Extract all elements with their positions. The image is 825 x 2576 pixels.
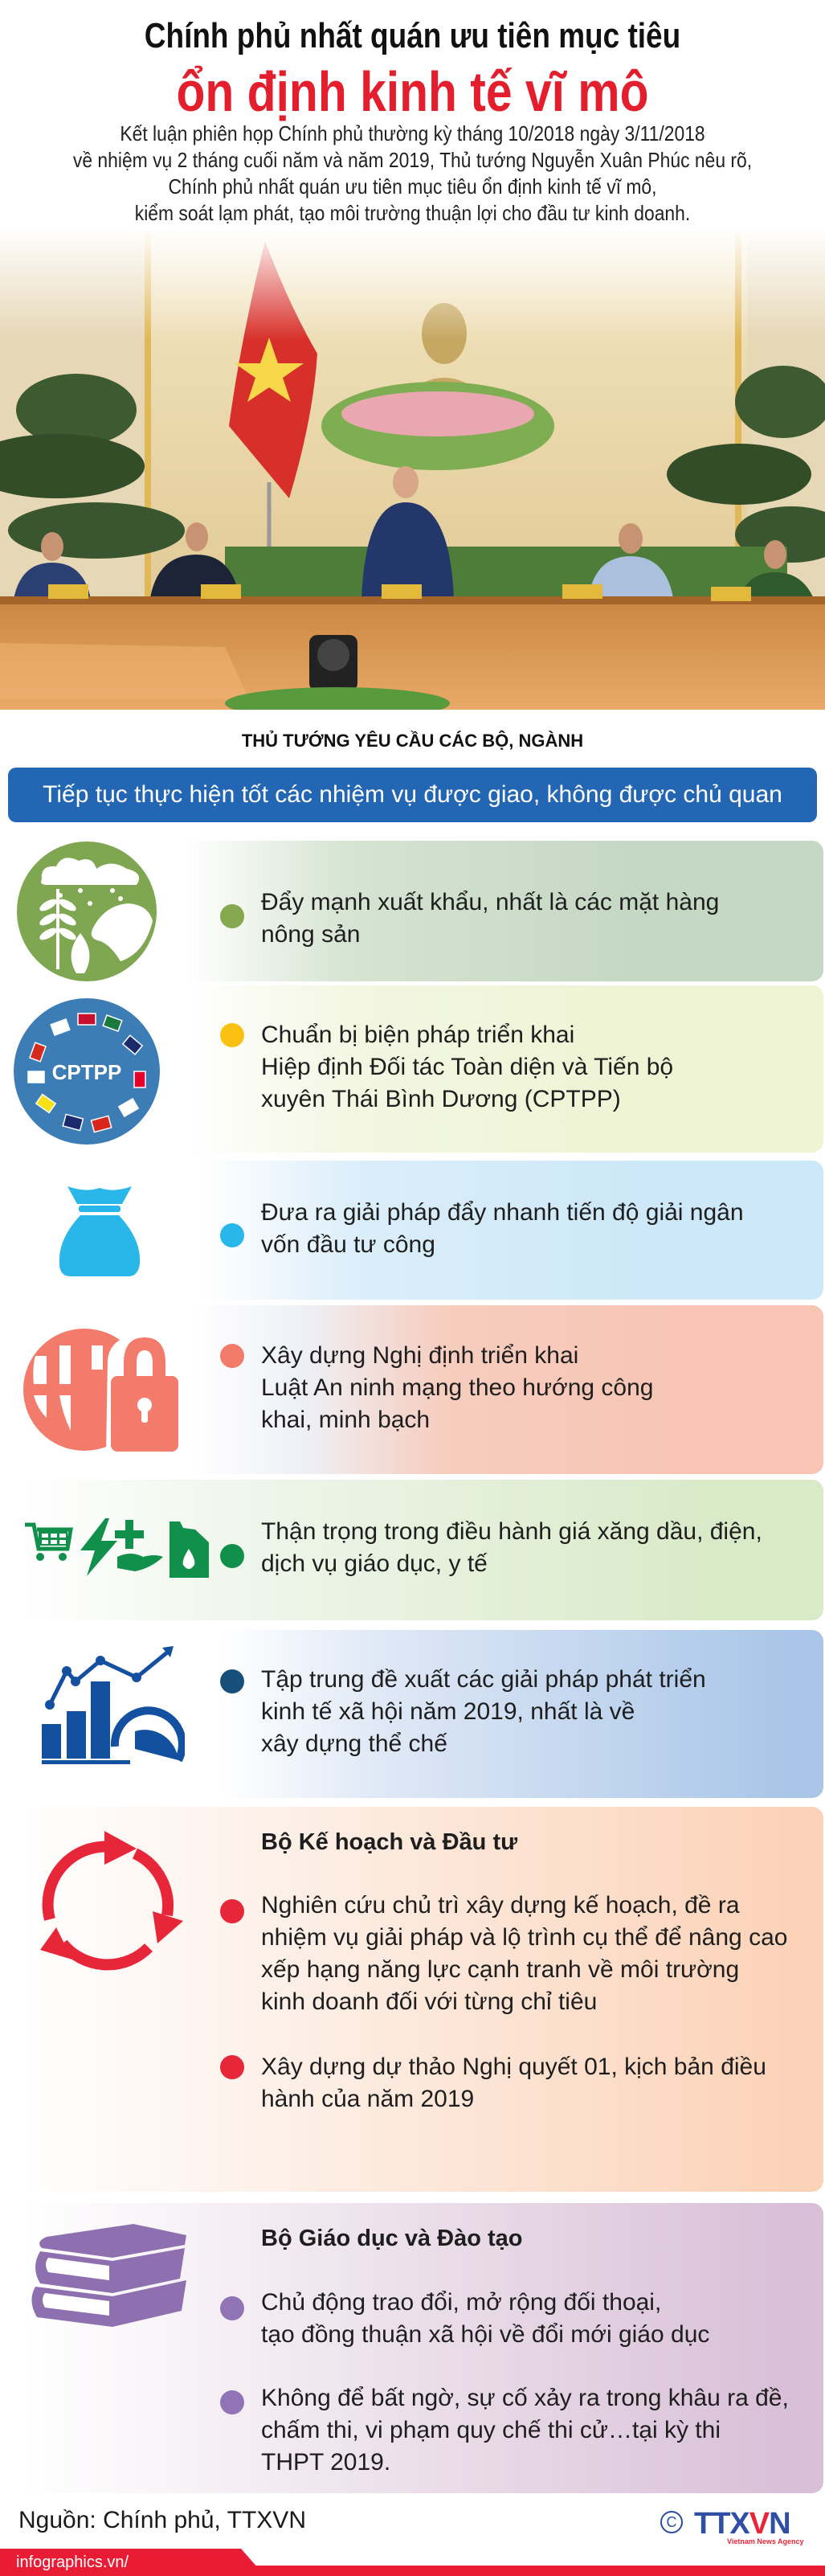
section heading: THỦ TƯỚNG YÊU CẦU CÁC BỘ, NGÀNH [242, 731, 583, 751]
text [261, 2054, 766, 2112]
text: Thận trọng trong điều hành giá xăng dầu, điện, [261, 1518, 762, 1545]
people [41, 532, 63, 561]
bullet dot [220, 1544, 244, 1568]
bullet dot [220, 1344, 244, 1368]
panel 7: Ministry of Planning and Investment [40, 1807, 823, 2192]
text [261, 889, 719, 948]
panel 6: socio-economic [42, 1630, 823, 1798]
camera [309, 635, 357, 691]
icon: CPTPP circle [14, 998, 160, 1145]
panel 5: prices [25, 1480, 823, 1620]
flowers [321, 382, 554, 470]
text: xuyên Thái Bình Dương (CPTPP) [261, 1086, 621, 1112]
logo: TTXVN: TTXVN [694, 2507, 790, 2541]
intro text [73, 121, 752, 225]
text: Xây dựng Nghị định triển khai [261, 1342, 578, 1369]
text: chấm thi, vi phạm quy chế thi cử…tại kỳ thi [261, 2417, 721, 2443]
logo: TTXVN: C [667, 2514, 676, 2530]
panel 3: public investment [59, 1161, 823, 1300]
text: kinh doanh đối với từng chỉ tiêu [261, 1988, 597, 2015]
text [261, 1022, 673, 1112]
title [145, 16, 680, 123]
icon: money bag [59, 1186, 140, 1276]
panel 2: CPTPP [14, 985, 823, 1153]
text: xếp hạng năng lực cạnh tranh về môi trường [261, 1956, 739, 1983]
icon: CPTPP circle: CPTPP [52, 1060, 121, 1084]
icon: cycle arrows [40, 1831, 183, 1971]
source: Nguồn: Chính phủ, TTXVN [18, 2507, 306, 2533]
logo: TTXVN: Vietnam News Agency [727, 2537, 804, 2545]
text: Xây dựng dự thảo Nghị quyết 01, kịch bản điều [261, 2054, 766, 2080]
intro text: Chính phủ nhất quán ưu tiên mục tiêu ổn định kinh tế vĩ mô, [168, 174, 657, 199]
bullet dot [220, 1023, 244, 1047]
text: Chủ động trao đổi, mở rộng đối thoại, [261, 2289, 661, 2316]
icon: globe and lock [23, 1329, 178, 1452]
icon: chart [42, 1646, 185, 1764]
text [261, 2385, 789, 2476]
text: kinh tế xã hội năm 2019, nhất là về [261, 1698, 635, 1725]
bonsai right [735, 366, 825, 438]
text: Không để bất ngờ, sự cố xảy ra trong khâu ra đề, [261, 2385, 789, 2411]
text: Đẩy mạnh xuất khẩu, nhất là các mặt hàng [261, 889, 719, 915]
title: ổn định kinh tế vĩ mô [177, 60, 649, 123]
text: nhiệm vụ giải pháp và lộ trình cụ thể để nâng cao [261, 1924, 787, 1951]
heading: Bộ Kế hoạch và Đầu tư [261, 1829, 517, 1855]
text: Nghiên cứu chủ trì xây dựng kế hoạch, đề ra [261, 1892, 740, 1919]
logo: TTXVN [660, 2507, 804, 2545]
title: Chính phủ nhất quán ưu tiên mục tiêu [145, 16, 680, 55]
icon: cart, power, health, fuel [25, 1518, 209, 1578]
heading: Bộ Giáo dục và Đào tạo [261, 2226, 522, 2251]
text: Chuẩn bị biện pháp triển khai [261, 1022, 574, 1048]
bullet dot [220, 2296, 244, 2320]
text: vốn đầu tư công [261, 1231, 435, 1258]
text: Đưa ra giải pháp đẩy nhanh tiến độ giải ngân [261, 1199, 744, 1226]
intro text: về nhiệm vụ 2 tháng cuối năm và năm 2019, Thủ tướng Nguyễn Xuân Phúc nêu rõ, [73, 148, 752, 172]
text [261, 1199, 744, 1258]
intro text: kiểm soát lạm phát, tạo môi trường thuận lợi cho đầu tư kinh doanh. [135, 201, 690, 225]
bullet dot [220, 1223, 244, 1247]
text: Luật An ninh mạng theo hướng công [261, 1374, 653, 1401]
text [261, 1892, 787, 2015]
text: xây dựng thể chế [261, 1730, 447, 1757]
panel 8: Ministry of Education [31, 2203, 823, 2493]
panel 4: cybersecurity [23, 1305, 823, 1474]
blue banner: Tiếp tục thực hiện tốt các nhiệm vụ được giao, không được chủ quan [43, 781, 782, 808]
bonsai left [16, 374, 137, 446]
text: khai, minh bạch [261, 1407, 430, 1433]
text [261, 2289, 709, 2348]
text: dịch vụ giáo dục, y tế [261, 1550, 488, 1577]
panel 1: export [17, 841, 823, 981]
text [261, 1666, 706, 1757]
text [261, 1518, 762, 1577]
flag [267, 482, 272, 579]
blue banner [8, 768, 817, 822]
text: Tập trung đề xuất các giải pháp phát triển [261, 1666, 706, 1693]
plants strip [225, 547, 787, 603]
bullet dot [220, 904, 244, 928]
bullet dot [220, 1899, 244, 1923]
bullet dot [220, 2390, 244, 2414]
icon: books [31, 2224, 186, 2327]
intro text: Kết luận phiên họp Chính phủ thường kỳ tháng 10/2018 ngày 3/11/2018 [120, 121, 705, 145]
text: Hiệp định Đối tác Toàn diện và Tiến bộ [261, 1054, 673, 1080]
bullet dot [220, 1669, 244, 1693]
text: THPT 2019. [261, 2449, 390, 2476]
bust [422, 303, 467, 364]
text: nông sản [261, 921, 360, 948]
footer bar: infographics.vn/ [16, 2553, 129, 2571]
table [0, 596, 825, 710]
text: hành của năm 2019 [261, 2086, 474, 2112]
icon: agriculture [17, 842, 157, 981]
text: tạo đồng thuận xã hội về đổi mới giáo dục [261, 2321, 709, 2348]
footer bar [0, 2549, 825, 2576]
photo: government meeting [0, 233, 825, 710]
bullet dot [220, 2055, 244, 2079]
text [261, 1342, 653, 1433]
